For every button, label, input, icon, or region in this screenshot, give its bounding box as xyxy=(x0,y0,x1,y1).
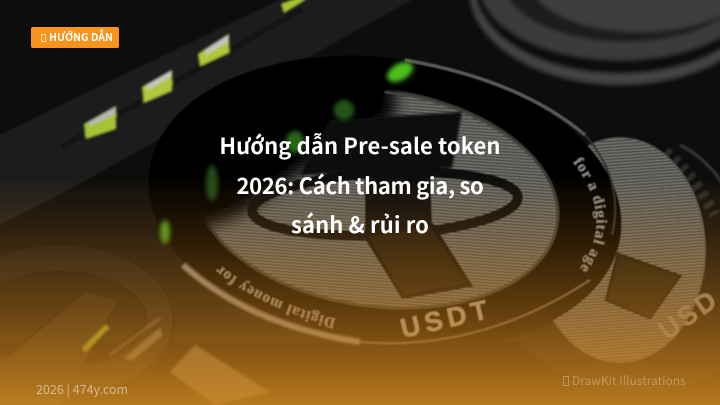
lower-left coin xyxy=(0,258,270,405)
title: 2026: Cách tham gia, so xyxy=(236,168,483,200)
wallet strip with green lights xyxy=(0,0,420,235)
coin lettering: USDT xyxy=(398,294,495,344)
category badge xyxy=(31,27,119,48)
title: sánh & rủi ro xyxy=(291,208,429,240)
coin rim highlights xyxy=(183,60,615,343)
green glints xyxy=(160,58,416,244)
footer: year and site: 2026 | 474y.com xyxy=(36,379,128,398)
tether logo xyxy=(251,112,519,297)
category badge: HƯỚNG DẪN xyxy=(49,30,113,45)
right coin xyxy=(492,137,720,393)
top right coin xyxy=(458,0,720,92)
title: Hướng dẫn Pre-sale token xyxy=(219,129,501,161)
coin lettering xyxy=(216,156,608,344)
shaded upper left of coin xyxy=(130,40,395,250)
orange gradient overlay xyxy=(0,175,720,405)
coin lettering: Digital money for xyxy=(216,266,336,329)
main coin xyxy=(148,56,622,346)
coin lettering: for a digital age xyxy=(572,156,608,272)
image credit: DrawKit Illustrations xyxy=(572,372,686,389)
title xyxy=(219,129,501,240)
